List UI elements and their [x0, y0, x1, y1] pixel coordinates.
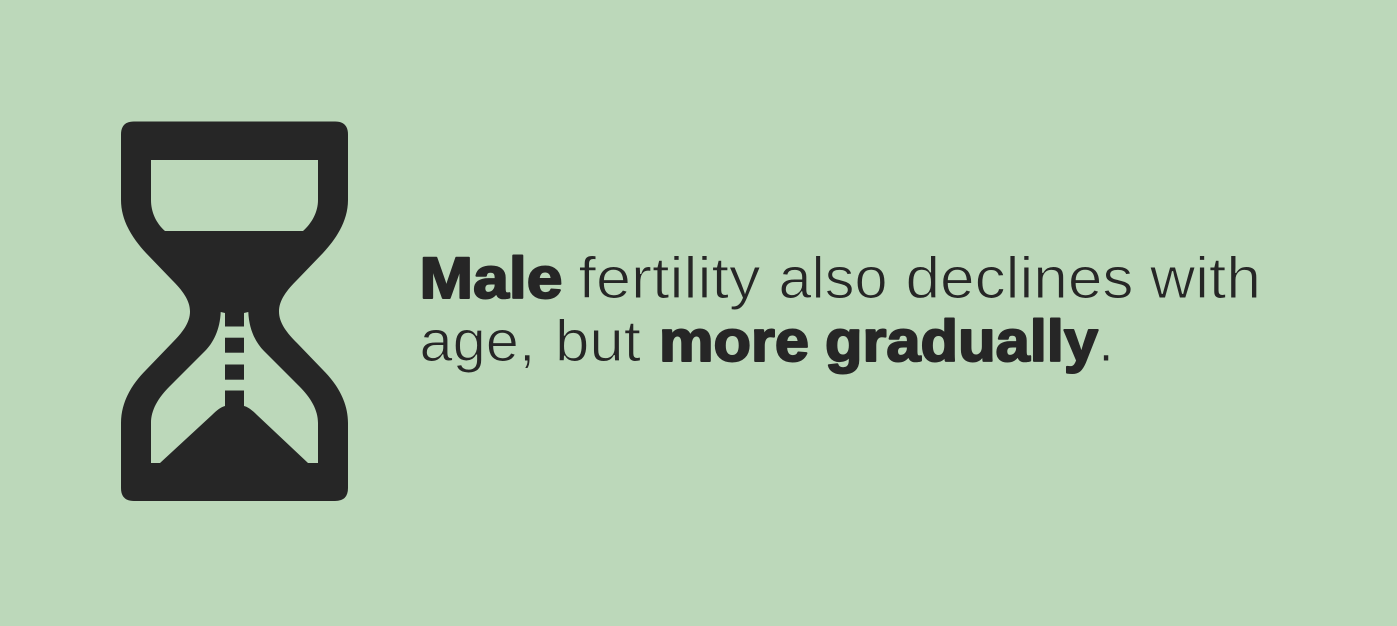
text block: statement: gradually — [825, 309, 1098, 374]
text block: statement — [420, 246, 1261, 374]
text block: statement: more — [659, 309, 809, 374]
icon: hourglass — [121, 122, 348, 501]
text block: statement: declines — [906, 246, 1134, 311]
text block: statement: with — [1149, 246, 1261, 311]
text block: statement: Male — [420, 246, 562, 311]
text block: statement: age, — [420, 309, 536, 374]
text block: statement: also — [778, 246, 888, 311]
text block: statement: fertility — [578, 246, 760, 311]
text block: statement: but — [555, 309, 641, 374]
text block: statement: . — [1098, 309, 1114, 374]
